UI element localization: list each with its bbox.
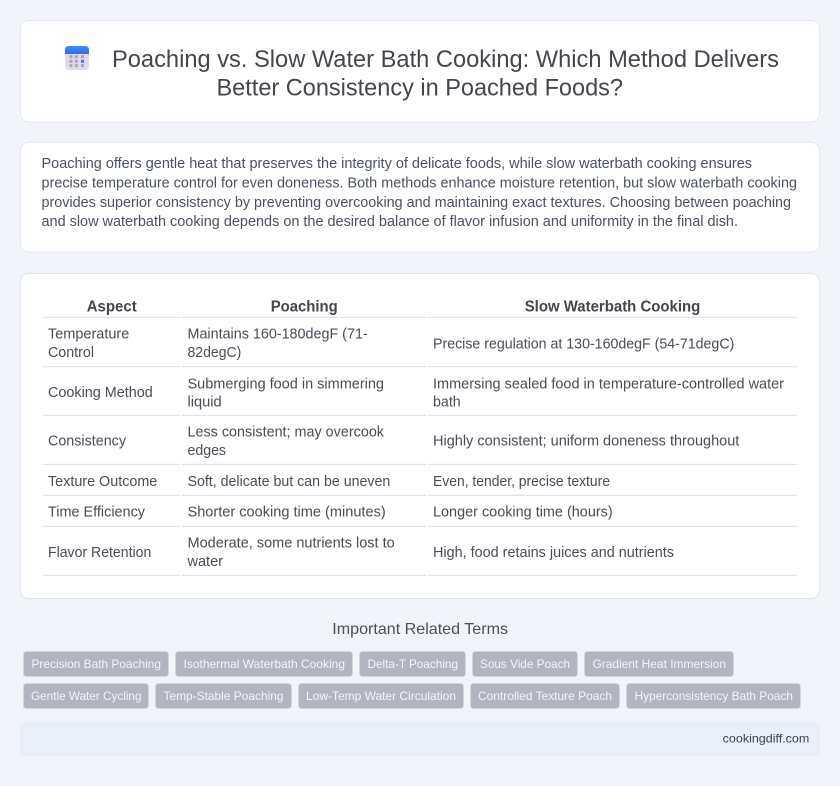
- row: time efficiency: Shorter cooking time (minutes): [188, 505, 386, 521]
- row: flavor retention: water: [186, 554, 223, 570]
- tag: Low-Temp Water Circulation: [306, 689, 456, 703]
- row: texture outcome: Soft, delicate but can be uneven: [188, 474, 390, 490]
- row: cooking method: Cooking Method: [48, 385, 153, 401]
- text block: intro: and slow waterbath cooking depends on the desired balance of flavor infusion and uniformity in the final dish.: [42, 214, 738, 230]
- tag cloud: related terms: [24, 652, 800, 708]
- row: temperature control: [43, 327, 797, 367]
- tag: Gradient Heat Immersion: [592, 657, 726, 671]
- tag: [470, 684, 620, 708]
- title: [112, 46, 779, 102]
- row: consistency: Highly consistent; uniform doneness throughout: [433, 434, 739, 450]
- tag: [176, 652, 352, 676]
- tag: Isothermal Waterbath Cooking: [184, 657, 345, 671]
- row: flavor retention: High, food retains juices and nutrients: [433, 545, 674, 561]
- row: flavor retention: [43, 536, 797, 576]
- row: consistency: Less consistent; may overcook: [188, 425, 385, 441]
- title: Better Consistency in Poached Foods?: [216, 75, 623, 102]
- table header: Poaching: [271, 299, 338, 316]
- tag: Controlled Texture Poach: [478, 689, 612, 703]
- row: consistency: edges: [188, 443, 226, 459]
- tag: Temp-Stable Poaching: [164, 689, 284, 703]
- row: temperature control: Temperature: [48, 327, 129, 343]
- tag: [24, 652, 168, 676]
- text block: intro: [42, 156, 797, 230]
- footer: source credit: cookingdiff.com: [723, 732, 809, 746]
- panel: intro paragraph: [20, 142, 820, 252]
- tag: Gentle Water Cycling: [31, 689, 142, 703]
- row: cooking method: Submerging food in simmering: [188, 376, 384, 392]
- row: consistency: [43, 425, 797, 465]
- row: flavor retention: Flavor Retention: [48, 545, 151, 561]
- tag: Delta-T Poaching: [368, 657, 458, 671]
- text block: intro: provides superior consistency by preventing overcooking and maintaining exact textures. Choosing between poaching: [42, 195, 791, 211]
- text block: intro: Poaching offers gentle heat that preserves the integrity of delicate foods, while slow waterbath cooking ensures: [42, 156, 752, 172]
- row: temperature control: Control: [48, 345, 94, 361]
- tag: [156, 684, 292, 708]
- row: consistency: Consistency: [48, 434, 127, 450]
- tag: Hyperconsistency Bath Poach: [634, 689, 793, 703]
- panel: title header: [20, 20, 820, 122]
- row: texture outcome: [43, 474, 797, 496]
- row: texture outcome: Even, tender, precise texture: [433, 474, 610, 490]
- tag: [360, 652, 466, 676]
- icon: calendar: [65, 46, 89, 70]
- row: flavor retention: Moderate, some nutrients lost to: [188, 536, 395, 552]
- table header: [43, 299, 797, 318]
- tag: Precision Bath Poaching: [32, 657, 161, 671]
- footer bar: [20, 722, 820, 756]
- tag: [626, 684, 800, 708]
- row: texture outcome: Texture Outcome: [48, 474, 157, 490]
- panel: comparison table: [20, 274, 820, 598]
- row: temperature control: 82degC): [188, 345, 241, 361]
- tag: [24, 684, 148, 708]
- row: cooking method: Immersing sealed food in temperature-controlled water: [433, 376, 784, 392]
- tag: Sous Vide Poach: [480, 657, 570, 671]
- row: cooking method: [43, 376, 797, 416]
- table header: Slow Waterbath Cooking: [525, 299, 700, 316]
- row: cooking method: liquid: [188, 394, 222, 410]
- table header: Aspect: [87, 299, 137, 316]
- tag: [298, 684, 464, 708]
- text block: intro: precise temperature control for even doneness. Both methods enhance moisture retention, but slow waterbath cooking: [42, 176, 797, 192]
- row: time efficiency: [43, 505, 797, 527]
- heading: important related terms: Important Related Terms: [332, 621, 508, 638]
- tag: [584, 652, 734, 676]
- row: time efficiency: Time Efficiency: [48, 505, 146, 521]
- row: temperature control: Precise regulation at 130-160degF (54-71degC): [433, 336, 734, 352]
- row: time efficiency: Longer cooking time (hours): [433, 505, 613, 521]
- row: cooking method: bath: [433, 394, 461, 410]
- row: temperature control: Maintains 160-180degF (71-: [188, 327, 368, 343]
- tag: [472, 652, 578, 676]
- title: Poaching vs. Slow Water Bath Cooking: Which Method Delivers: [112, 46, 779, 73]
